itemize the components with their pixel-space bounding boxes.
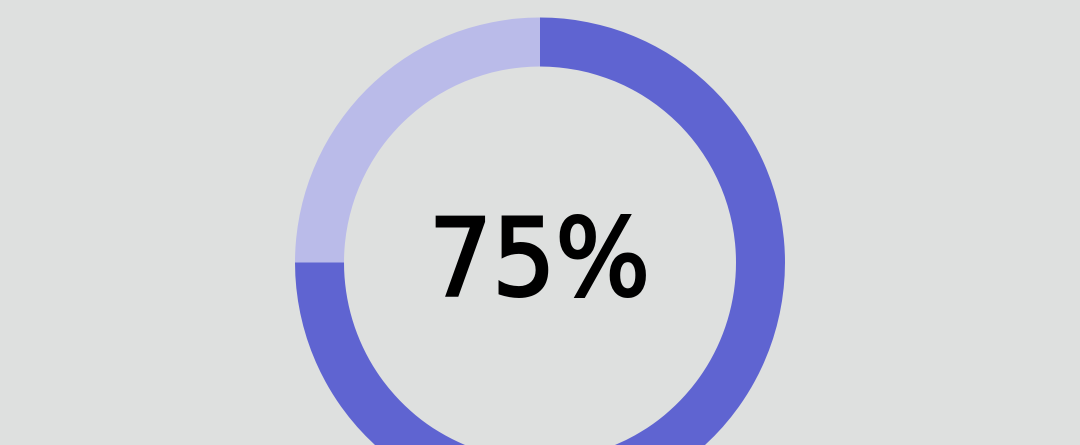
ring segment: remaining 25%	[295, 18, 540, 262]
center value label: 75%	[429, 197, 650, 321]
ring segment: filled 75%	[295, 18, 785, 445]
